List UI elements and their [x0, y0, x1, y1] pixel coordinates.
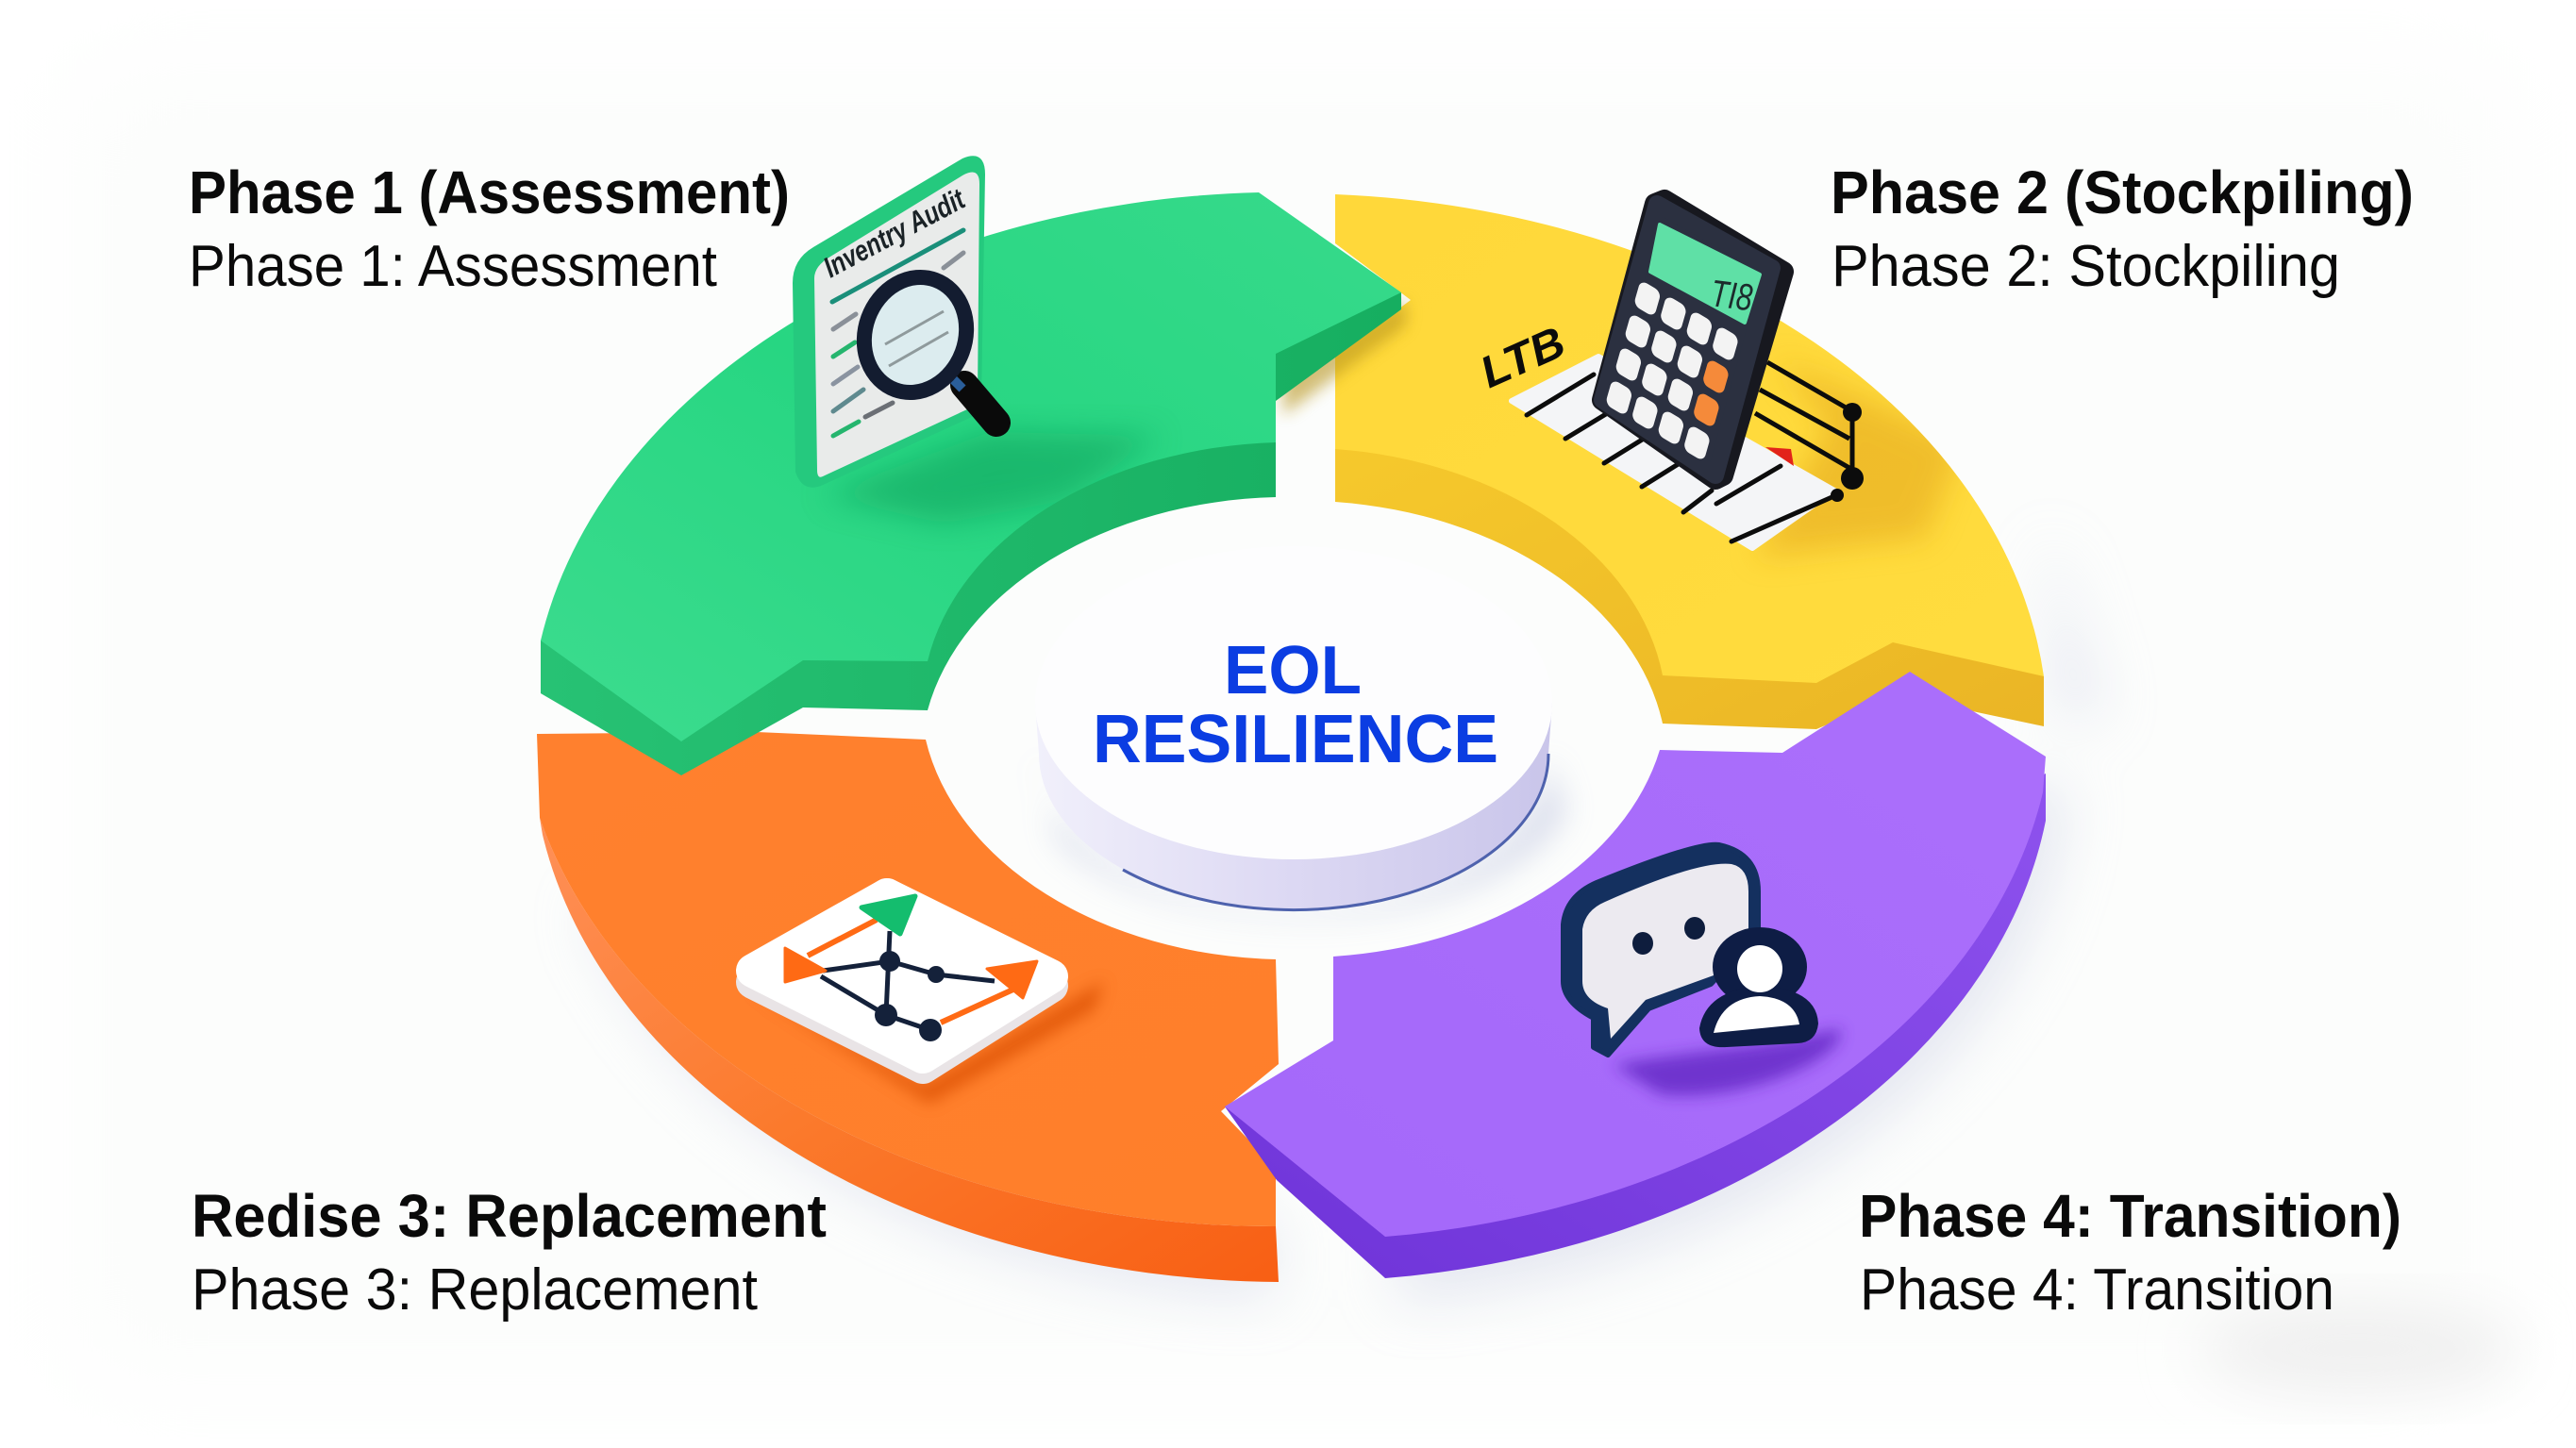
- icon shadow on yellow: [1755, 358, 1963, 557]
- document title text: Inventry Audit: [818, 182, 971, 284]
- icon: green arrow head: [861, 896, 915, 934]
- icon: orange left arrow head: [785, 948, 826, 982]
- panel: phase 1 green segment: [541, 156, 1406, 775]
- icon: orange right arrow head: [987, 961, 1037, 998]
- calculator keys: [1605, 280, 1739, 461]
- centre heading: RESILIENCE: RESILIENCE: [1093, 702, 1498, 777]
- calculator display text: TI8: [1709, 273, 1755, 320]
- centre heading: EOL: EOL: [1224, 633, 1362, 708]
- panel: phase 4 purple segment: [1225, 672, 2046, 1278]
- icon shadow on orange: [745, 981, 1104, 1104]
- label: phase 4: Phase 4: Transition: [1860, 1257, 2334, 1323]
- label: phase 3: Redise 3: Replacement: [192, 1182, 827, 1250]
- icon: replacement network card: [753, 895, 1051, 1067]
- icon: magnifying glass: [848, 263, 996, 423]
- label: phase 1: Phase 1 (Assessment): [189, 158, 790, 226]
- icon: LTB stockpile ladder: [1512, 357, 1864, 548]
- panel: phase 3 orange segment: [537, 732, 1279, 1282]
- label: phase 3: Phase 3: Replacement: [192, 1257, 758, 1323]
- panel: centre disc: [1035, 546, 1566, 918]
- icon: inventory audit document: [793, 156, 996, 488]
- ring cast shadow: [585, 528, 2104, 1302]
- icon shadow on green: [822, 432, 1161, 524]
- icon: chat bubble: [1564, 845, 1758, 1055]
- label: phase 2: Phase 2: Stockpiling: [1832, 234, 2340, 299]
- calculator screen: [1650, 225, 1760, 323]
- document lines: [832, 230, 963, 436]
- icon: calculator: [1602, 200, 1783, 479]
- icon: person: [1699, 927, 1818, 1047]
- label: phase 1: Phase 1: Assessment: [189, 234, 717, 299]
- panel: phase 2 yellow segment: [1335, 194, 2044, 729]
- chat dots: [1632, 932, 1653, 955]
- label: phase 4: Phase 4: Transition): [1859, 1182, 2401, 1250]
- label: phase 1: [189, 158, 790, 299]
- label: phase 2: Phase 2 (Stockpiling): [1831, 158, 2414, 226]
- icon shadow on purple: [1614, 1028, 1841, 1095]
- label: phase 3: [192, 1182, 827, 1323]
- icon: LTB text: LTB: [1473, 316, 1572, 397]
- label: phase 4: [1859, 1182, 2401, 1323]
- label: phase 2: [1831, 158, 2414, 299]
